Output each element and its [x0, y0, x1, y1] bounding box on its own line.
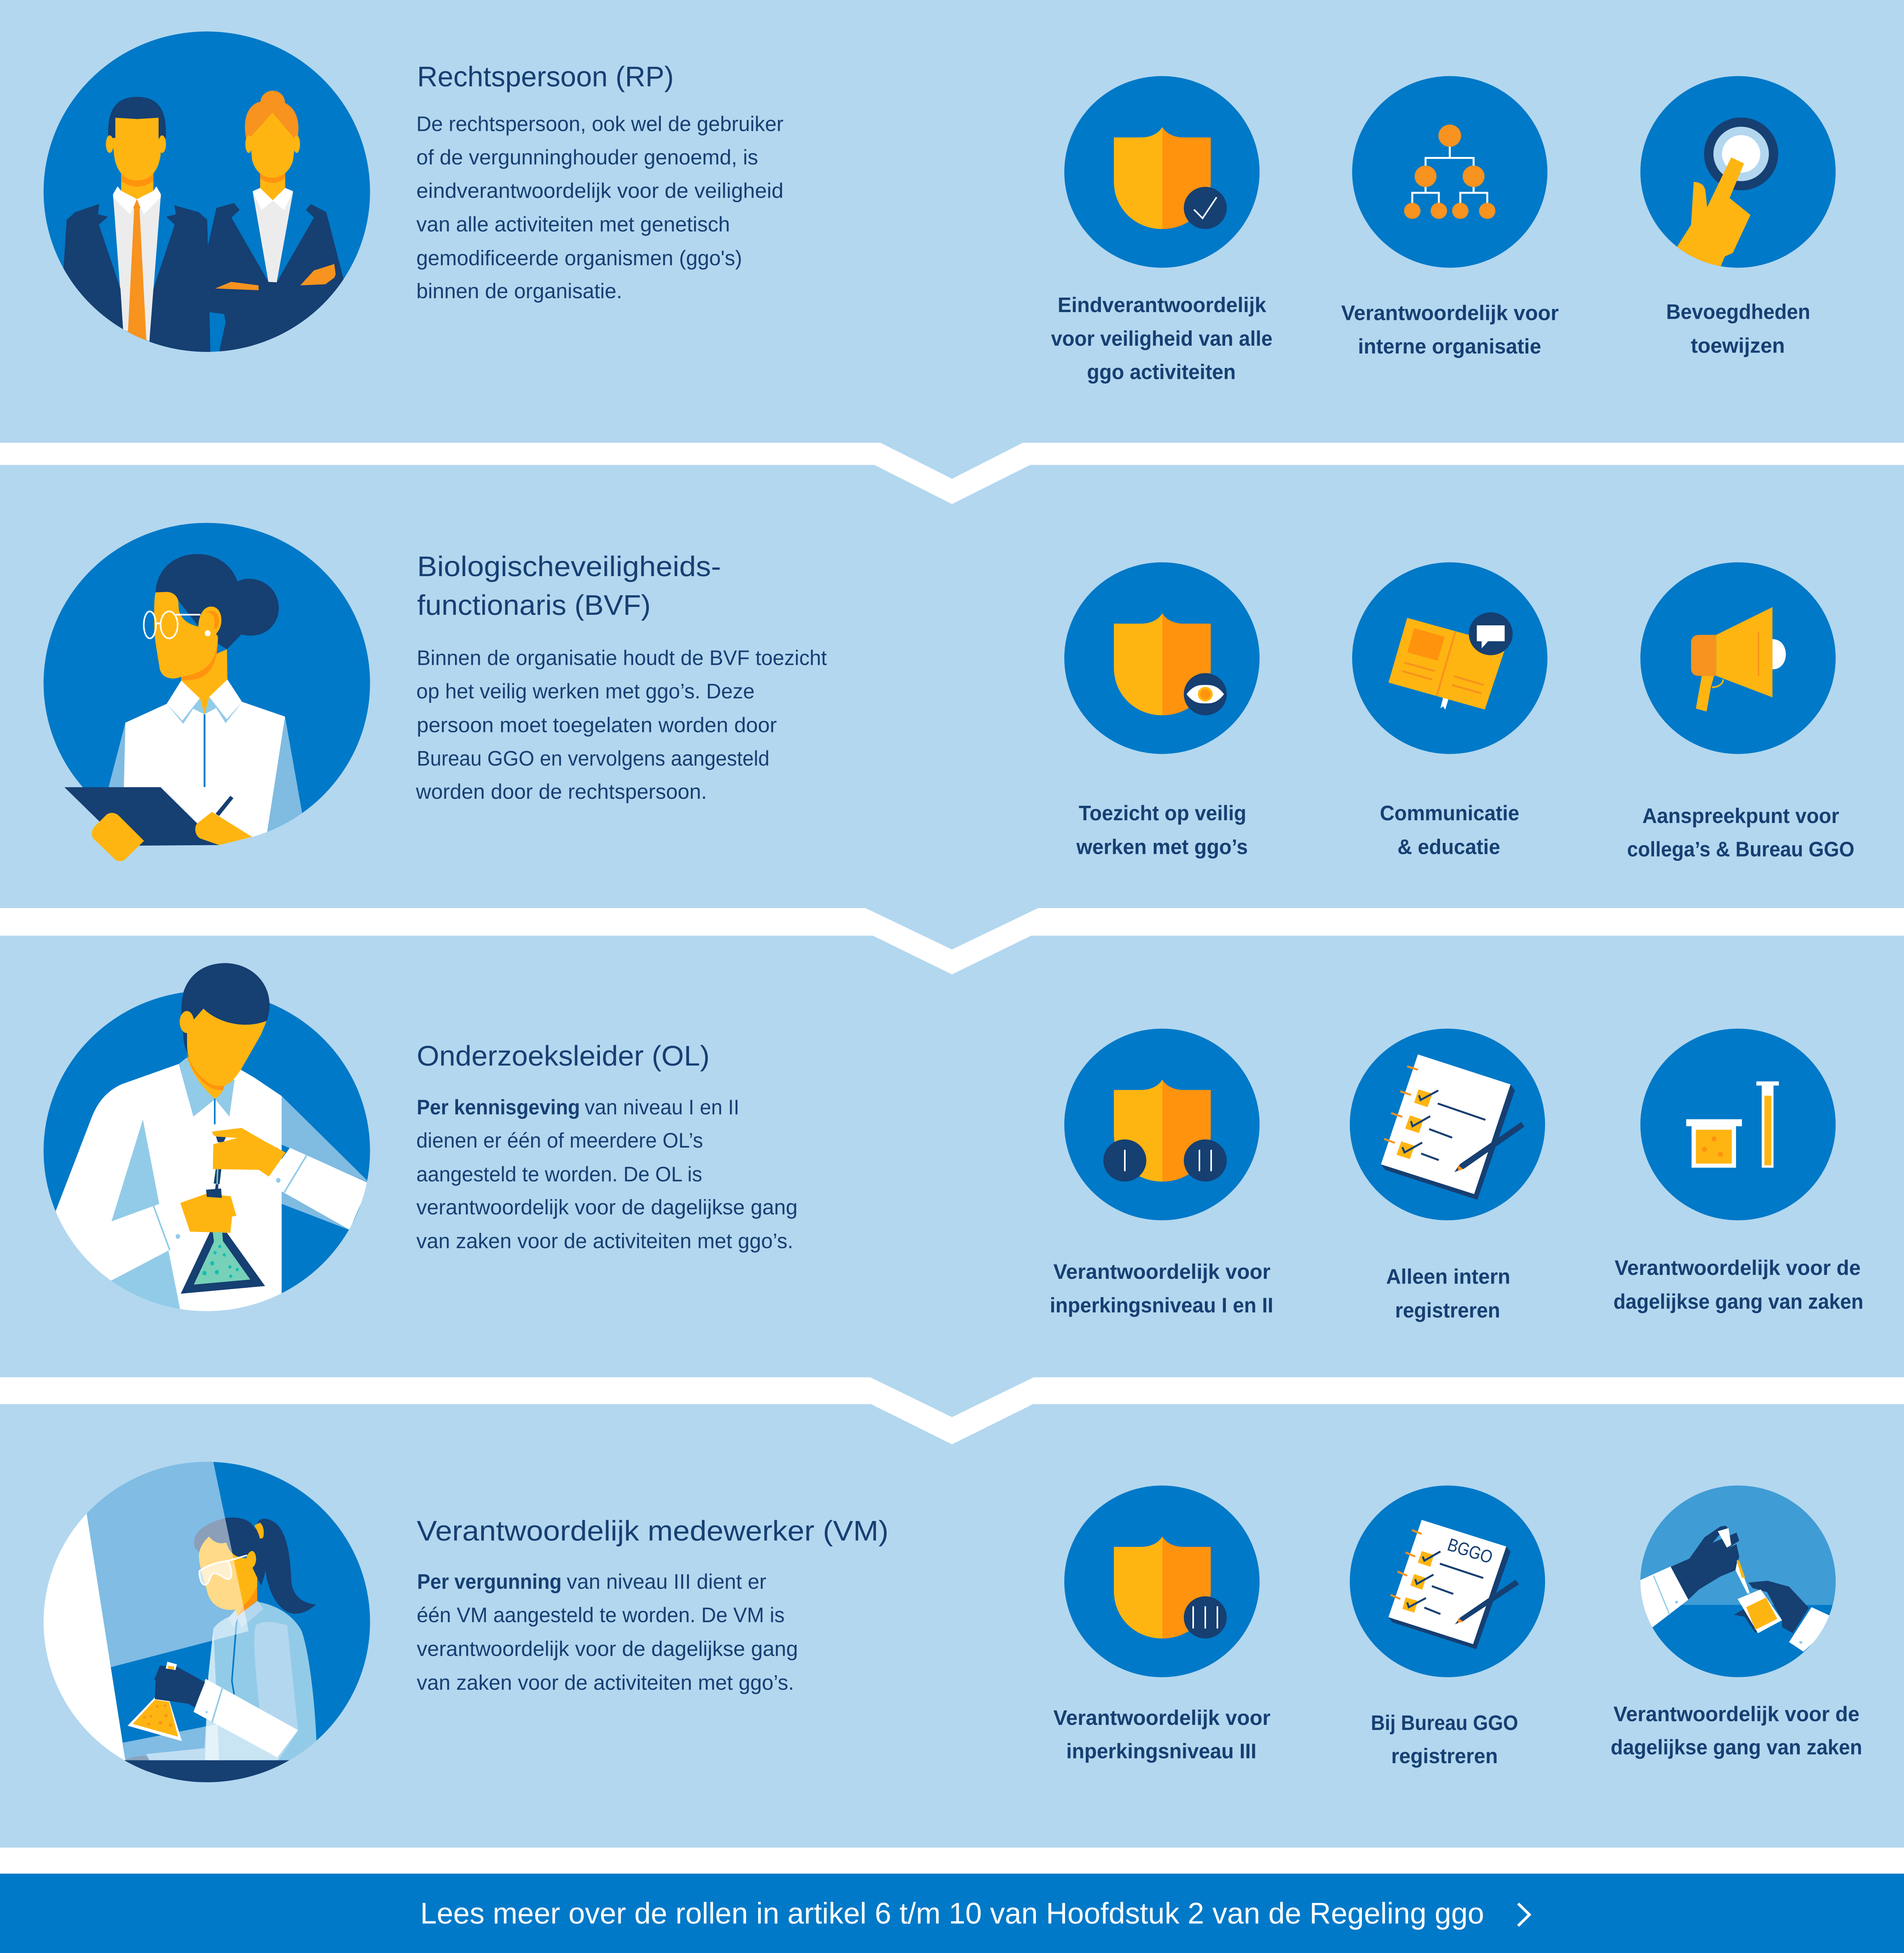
caption: dagelijkse gang van zaken	[1611, 1735, 1862, 1759]
icon: BGGO checklist with pen	[1350, 1485, 1545, 1677]
text block: of de vergunninghouder genoemd, is	[416, 145, 758, 169]
icon: jar and test tube	[1640, 1028, 1836, 1220]
icon: chevron right	[1518, 1903, 1529, 1926]
text block	[416, 646, 827, 803]
caption	[1627, 804, 1854, 861]
arrow divider 3	[0, 1377, 1904, 1444]
text block: Binnen de organisatie houdt de BVF toezicht	[417, 646, 827, 669]
illustration: researcher holding flask	[31, 963, 370, 1334]
text block: van alle activiteiten met genetisch	[416, 212, 730, 236]
caption: Communicatie	[1380, 801, 1519, 825]
bottom white strip	[0, 1848, 1904, 1874]
icon: shield with eye	[1064, 562, 1260, 754]
text block: één VM aangesteld te worden. De VM is	[417, 1603, 785, 1627]
heading: Verantwoordelijk medewerker (VM)	[417, 1515, 889, 1547]
icon: gloved hands with pipette and vial	[1624, 1485, 1838, 1677]
panel: Onderzoeksleider (OL)	[0, 935, 1904, 1377]
text block: De rechtspersoon, ook wel de gebruiker	[416, 112, 783, 136]
caption: Eindverantwoordelijk	[1058, 293, 1266, 317]
icon: BGGO checklist with pen: BGGO	[1445, 1534, 1495, 1567]
heading: Rechtspersoon (RP)	[417, 61, 674, 93]
text block: aangesteld te worden. De OL is	[416, 1162, 702, 1186]
caption	[1611, 1702, 1862, 1759]
text block	[416, 112, 783, 303]
caption	[1386, 1264, 1510, 1322]
caption: registreren	[1391, 1744, 1498, 1768]
arrow divider 1	[0, 443, 1904, 504]
text block: worden door de rechtspersoon.	[416, 780, 707, 803]
text block	[417, 1570, 798, 1694]
footer text: Lees meer over de rollen in artikel 6 t/m 10 van Hoofdstuk 2 van de Regeling ggo	[420, 1896, 1484, 1930]
caption: interne organisatie	[1358, 334, 1541, 358]
heading: functionaris (BVF)	[417, 589, 651, 621]
icon: checklist with pen	[1350, 1028, 1545, 1220]
text block: van niveau III dient er	[567, 1570, 766, 1593]
panel: Biologischeveiligheidsfunctionaris (BVF)	[44, 523, 1854, 861]
icon: megaphone	[1640, 562, 1836, 754]
caption	[1613, 1256, 1863, 1313]
heading	[417, 550, 721, 621]
text block: Bureau GGO en vervolgens aangesteld	[417, 746, 769, 770]
caption: inperkingsniveau III	[1066, 1739, 1256, 1763]
illustration: woman with glasses and clipboard	[44, 523, 370, 861]
heading: Onderzoeksleider (OL)	[417, 1040, 710, 1072]
illustration: lab worker behind fume hood	[31, 1449, 383, 1794]
caption: inperkingsniveau I en II	[1050, 1293, 1273, 1317]
caption: Verantwoordelijk voor	[1053, 1260, 1271, 1284]
caption: Verantwoordelijk voor	[1053, 1706, 1271, 1730]
text block: persoon moet toegelaten worden door	[417, 713, 777, 737]
icon: organisation chart	[1352, 76, 1547, 268]
panel background	[0, 465, 1904, 908]
caption: collega’s & Bureau GGO	[1627, 837, 1854, 861]
text block: Per vergunning	[417, 1570, 562, 1593]
caption: Aanspreekpunt voor	[1642, 804, 1839, 828]
text block	[416, 1095, 798, 1253]
text block: verantwoordelijk voor de dagelijkse gang	[416, 1195, 798, 1219]
panel background	[0, 0, 1904, 443]
caption: werken met ggo’s	[1076, 835, 1248, 859]
panel: Verantwoordelijk medewerker (VM)	[0, 1404, 1904, 1848]
caption: Verantwoordelijk voor	[1341, 301, 1559, 325]
caption	[1076, 801, 1248, 859]
caption: Alleen intern	[1386, 1264, 1510, 1288]
footer banner	[0, 1874, 1904, 1953]
caption	[1371, 1711, 1518, 1768]
icon: shield with check	[1064, 76, 1260, 268]
arrow divider 2	[0, 908, 1904, 975]
caption: Bevoegdheden	[1666, 300, 1810, 323]
caption: toewijzen	[1691, 334, 1785, 357]
caption: registreren	[1395, 1298, 1500, 1322]
text block: van zaken voor de activiteiten met ggo’s.	[417, 1671, 794, 1694]
caption: dagelijkse gang van zaken	[1613, 1289, 1863, 1313]
text block: dienen er één of meerdere OL’s	[416, 1128, 703, 1152]
illustration: two business people	[44, 31, 370, 362]
caption: & educatie	[1397, 835, 1500, 859]
heading: Biologischeveiligheids-	[417, 550, 721, 582]
text block: verantwoordelijk voor de dagelijkse gang	[417, 1637, 798, 1660]
caption: Bij Bureau GGO	[1371, 1711, 1518, 1735]
panel background	[0, 935, 1904, 1377]
caption	[1051, 293, 1272, 384]
caption	[1053, 1706, 1271, 1763]
caption: Verantwoordelijk voor de	[1615, 1256, 1861, 1280]
caption	[1341, 301, 1559, 358]
caption: Verantwoordelijk voor de	[1613, 1702, 1859, 1726]
panel background	[0, 1404, 1904, 1848]
panel: Rechtspersoon (RP)	[44, 31, 1836, 384]
text block: binnen de organisatie.	[416, 279, 622, 303]
caption	[1380, 801, 1519, 859]
icon: hand pressing button	[1640, 76, 1836, 280]
icon: open book with speech bubble	[1352, 562, 1547, 754]
icon: shield with levels I and II	[1064, 1028, 1260, 1220]
caption: voor veiligheid van alle	[1051, 327, 1272, 350]
text block: gemodificeerde organismen (ggo's)	[416, 246, 742, 270]
caption	[1666, 300, 1810, 357]
caption: ggo activiteiten	[1087, 360, 1236, 384]
text block: eindverantwoordelijk voor de veiligheid	[416, 179, 783, 202]
icon: shield with level III	[1064, 1485, 1260, 1677]
text block: van niveau I en II	[585, 1095, 739, 1119]
caption: Toezicht op veilig	[1079, 801, 1246, 825]
text block: op het veilig werken met ggo’s. Deze	[416, 679, 755, 703]
caption	[1050, 1260, 1273, 1317]
text block: van zaken voor de activiteiten met ggo’s.	[416, 1229, 793, 1253]
text block: Per kennisgeving	[417, 1095, 580, 1119]
